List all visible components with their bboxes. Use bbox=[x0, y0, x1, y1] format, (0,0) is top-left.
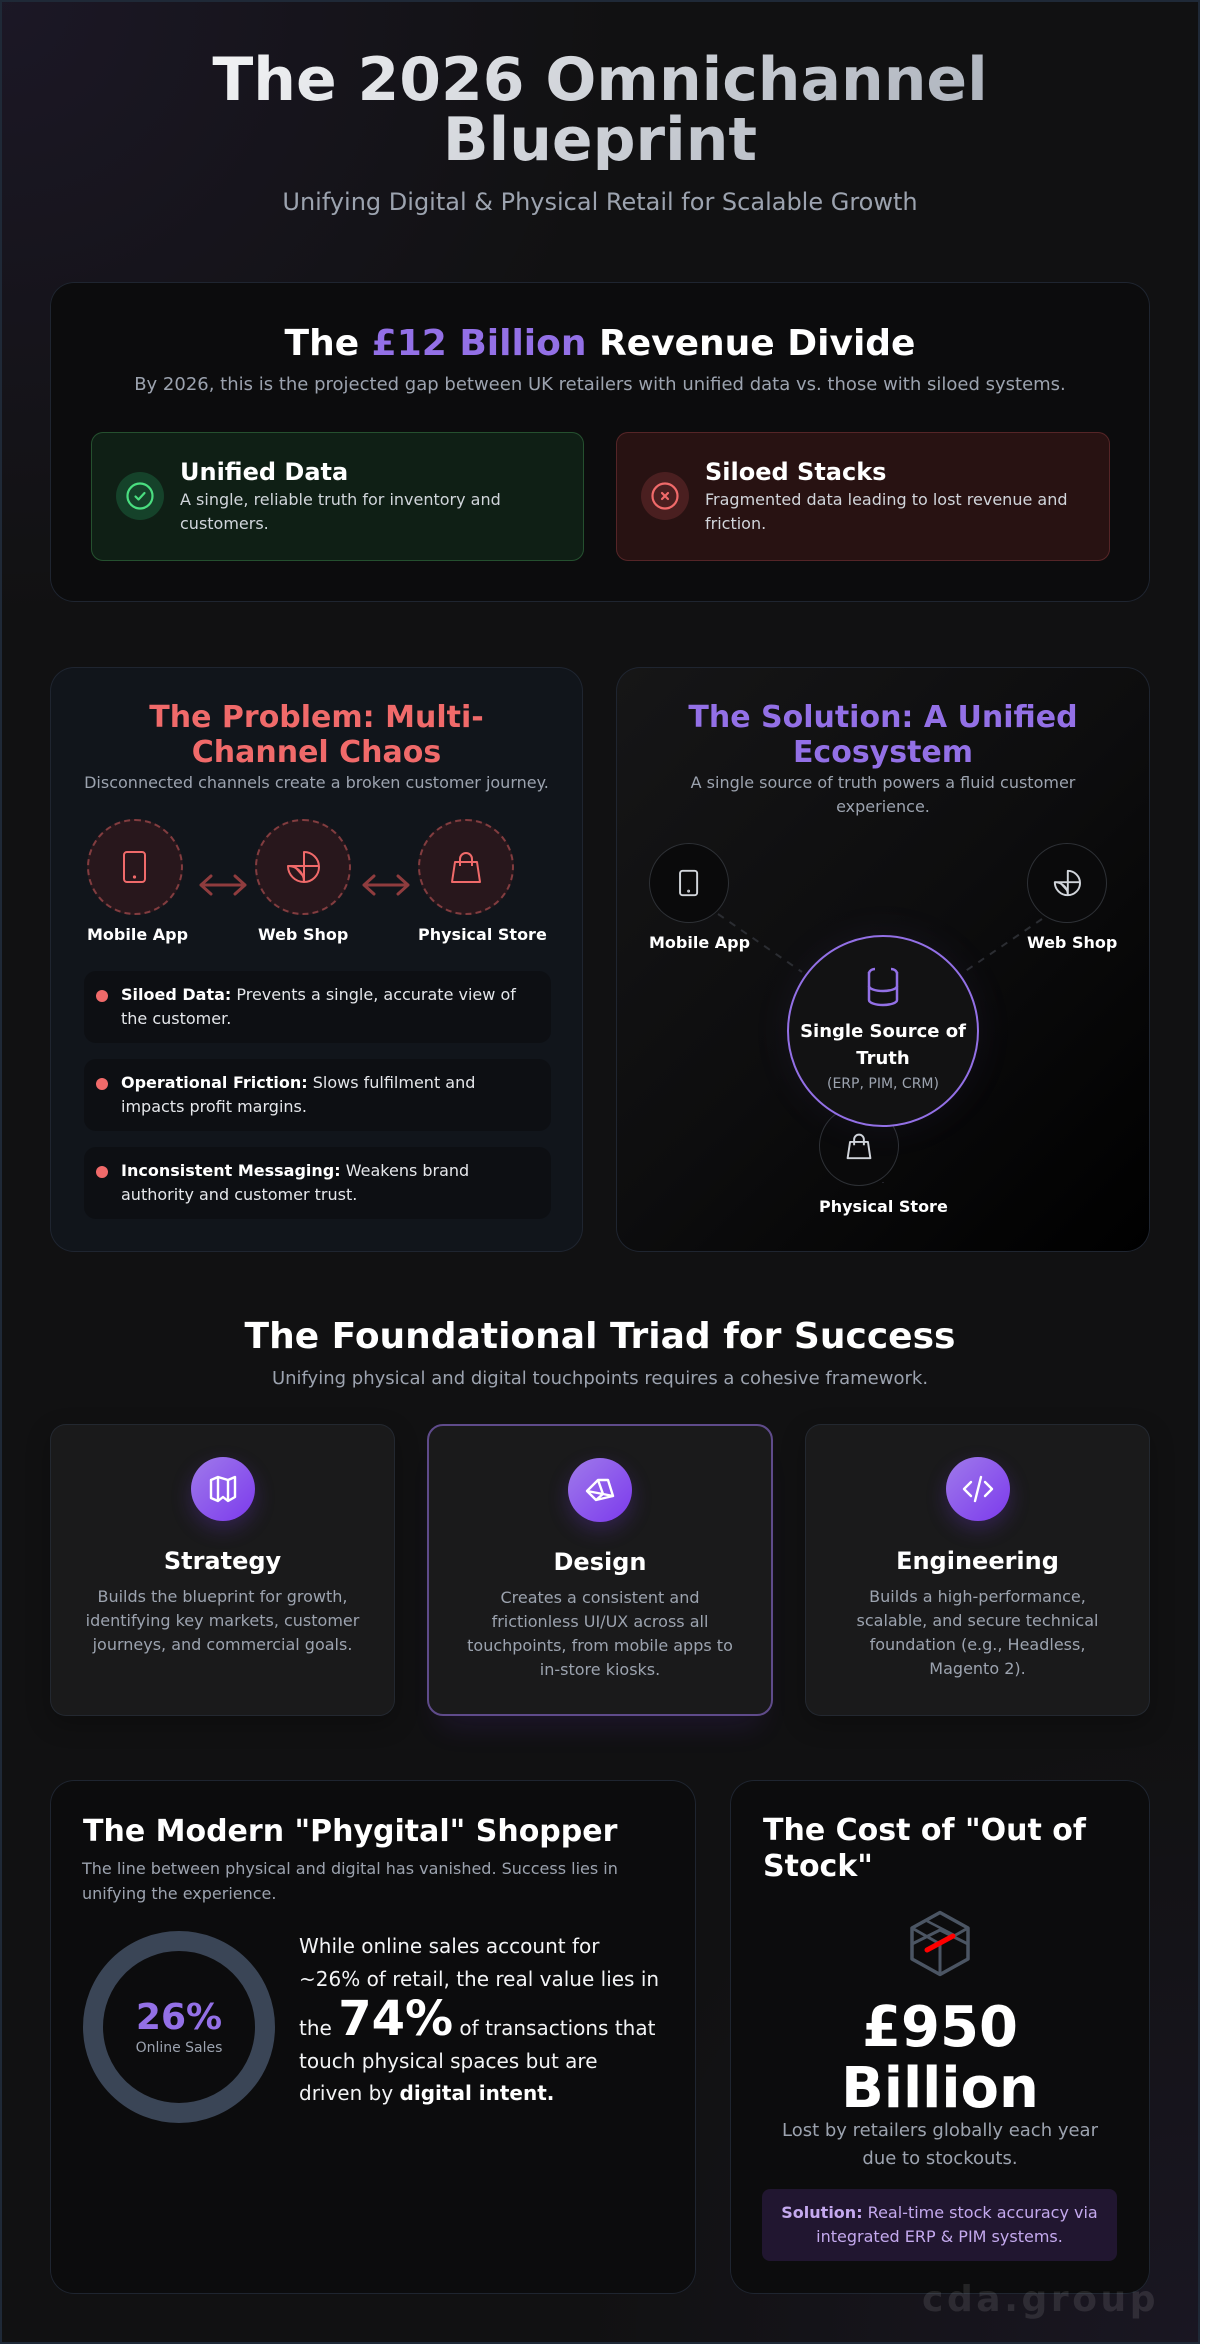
arrow bbox=[362, 874, 410, 896]
subtitle: Unifying Digital & Physical Retail for Scalable Growth bbox=[282, 188, 918, 216]
callout: solution bbox=[762, 2189, 1117, 2261]
panel: phygital shopper bbox=[50, 1780, 696, 2294]
text: siloed stacks: friction. bbox=[705, 514, 766, 533]
icon: mobile app bbox=[649, 843, 729, 923]
label: mobile app: Mobile App bbox=[87, 925, 188, 944]
node: physical store bbox=[819, 1114, 948, 1216]
text: design: frictionless UI/UX across all bbox=[492, 1612, 708, 1631]
icon: design bbox=[568, 1458, 632, 1522]
node: mobile app bbox=[649, 843, 750, 952]
card: siloed stacks bbox=[616, 432, 1110, 561]
panel: the solution bbox=[616, 667, 1150, 1252]
title: Blueprint bbox=[443, 105, 757, 175]
donut chart bbox=[83, 1931, 275, 2123]
bullet bbox=[96, 1166, 108, 1178]
text: 74% statistic: the 74% of transactions that bbox=[299, 1991, 655, 2047]
callout: solution: Solution: Real-time stock accuracy via bbox=[781, 2203, 1098, 2222]
connector lines bbox=[718, 913, 1042, 1183]
icon: broken box bbox=[910, 1910, 970, 1976]
heading: the problem: Channel Chaos bbox=[192, 735, 441, 770]
heading: out of stock: Stock" bbox=[763, 1849, 873, 1884]
icon: physical store bbox=[819, 1106, 899, 1186]
hub: single source of truth bbox=[787, 935, 979, 1127]
text: 74% statistic: touch physical spaces but are bbox=[299, 2049, 598, 2073]
description: the problem: Disconnected channels create a broken customer journey. bbox=[84, 773, 549, 792]
heading: foundational triad: The Foundational Triad for Success bbox=[245, 1316, 955, 1357]
text: design bbox=[467, 1588, 733, 1679]
description: phygital shopper: The line between physical and digital has vanished. Success lies in bbox=[82, 1859, 618, 1878]
description: the solution: experience. bbox=[836, 797, 930, 816]
text: design: touchpoints, from mobile apps to bbox=[467, 1636, 733, 1655]
text: 74% statistic bbox=[299, 1934, 659, 2105]
text: engineering bbox=[857, 1587, 1098, 1678]
heading: the solution bbox=[688, 700, 1078, 770]
description: the solution: A single source of truth powers a fluid customer bbox=[691, 773, 1075, 792]
title: unified data: Unified Data bbox=[180, 458, 348, 486]
heading: revenue divide: The £12 Billion Revenue Divide bbox=[285, 323, 915, 364]
panel: revenue divide bbox=[50, 282, 1150, 602]
title: siloed stacks: Siloed Stacks bbox=[705, 458, 886, 486]
card: unified data bbox=[91, 432, 584, 561]
text: siloed stacks: Fragmented data leading to lost revenue and bbox=[705, 490, 1067, 509]
value: 26%: 26% bbox=[136, 1997, 222, 2038]
heading: phygital shopper: The Modern "Phygital" Shopper bbox=[83, 1814, 617, 1849]
title: design: Design bbox=[554, 1548, 646, 1576]
text: inconsistent messaging: Inconsistent Messaging: Weakens brand bbox=[121, 1161, 469, 1180]
description: foundational triad: Unifying physical and digital touchpoints requires a cohesive framework. bbox=[272, 1368, 928, 1389]
label: hub bbox=[800, 1021, 966, 1069]
text: unified data: customers. bbox=[180, 514, 269, 533]
title: strategy: Strategy bbox=[164, 1547, 281, 1575]
bullet bbox=[96, 990, 108, 1002]
text: operational friction: Operational Friction: Slows fulfilment and bbox=[121, 1073, 475, 1092]
text: siloed stacks bbox=[705, 490, 1067, 533]
text: engineering: scalable, and secure technical bbox=[857, 1611, 1098, 1630]
icon: cross bbox=[641, 472, 689, 520]
value: £950 billion bbox=[841, 1995, 1039, 2120]
card: design bbox=[427, 1424, 773, 1716]
text: 74% statistic: ~26% of retail, the real value lies in bbox=[299, 1967, 659, 1991]
icon: code bbox=[946, 1457, 1010, 1521]
label: mobile app: Mobile App bbox=[649, 933, 750, 952]
text: engineering: Magento 2). bbox=[929, 1659, 1026, 1678]
value: £950 billion: Billion bbox=[841, 2056, 1039, 2120]
node: web shop bbox=[1027, 843, 1117, 952]
text: design: in-store kiosks. bbox=[540, 1660, 660, 1679]
icon: web shop bbox=[1027, 843, 1107, 923]
text: inconsistent messaging: authority and customer trust. bbox=[121, 1185, 357, 1204]
title: engineering: Engineering bbox=[896, 1547, 1059, 1575]
text: siloed data: Siloed Data: Prevents a single, accurate view of bbox=[121, 985, 516, 1004]
label: online sales: Online Sales bbox=[136, 2040, 222, 2056]
label: hub: Single Source of bbox=[800, 1021, 966, 1042]
label: physical store: Physical Store bbox=[819, 1197, 948, 1216]
text: engineering: foundation (e.g., Headless, bbox=[870, 1635, 1085, 1654]
card: strategy bbox=[50, 1424, 395, 1716]
text: 74% statistic: driven by digital intent. bbox=[299, 2081, 554, 2105]
heading: the solution: Ecosystem bbox=[793, 735, 973, 770]
text: siloed data: the customer. bbox=[121, 1009, 231, 1028]
icon: web shop bbox=[255, 819, 351, 915]
text: siloed data bbox=[121, 985, 516, 1028]
text: strategy: journeys, and commercial goals. bbox=[93, 1635, 352, 1654]
text: operational friction bbox=[121, 1073, 475, 1116]
arrow bbox=[200, 874, 246, 896]
description: phygital shopper bbox=[82, 1859, 618, 1903]
text: strategy: identifying key markets, customer bbox=[86, 1611, 359, 1630]
description: out of stock: due to stockouts. bbox=[862, 2148, 1018, 2169]
description: out of stock: Lost by retailers globally each year bbox=[782, 2120, 1098, 2141]
icon: physical store bbox=[418, 819, 514, 915]
text: design: Creates a consistent and bbox=[500, 1588, 700, 1607]
heading: out of stock bbox=[763, 1813, 1086, 1884]
icon: check bbox=[116, 472, 164, 520]
watermark: cda.group bbox=[922, 2279, 1159, 2320]
text: unified data bbox=[180, 490, 501, 533]
description: the solution bbox=[690, 773, 1076, 816]
label: web shop: Web Shop bbox=[1027, 933, 1117, 952]
label: hub systems: (ERP, PIM, CRM) bbox=[827, 1076, 939, 1092]
list item: operational friction bbox=[84, 1059, 551, 1131]
card: engineering bbox=[805, 1424, 1150, 1716]
icon: mobile app bbox=[87, 819, 183, 915]
icon: database bbox=[868, 968, 898, 1006]
list item: siloed data bbox=[84, 971, 551, 1043]
callout: solution: integrated ERP & PIM systems. bbox=[816, 2227, 1063, 2246]
label: web shop: Web Shop bbox=[258, 925, 348, 944]
title bbox=[50, 50, 1150, 170]
icon: map bbox=[190, 1457, 254, 1521]
list item: inconsistent messaging bbox=[84, 1147, 551, 1219]
text: strategy bbox=[86, 1587, 360, 1654]
bullet bbox=[96, 1078, 108, 1090]
text: engineering: Builds a high-performance, bbox=[869, 1587, 1086, 1606]
label: hub: Truth bbox=[856, 1048, 910, 1069]
panel: the problem bbox=[50, 667, 583, 1252]
title: The 2026 Omnichannel bbox=[212, 45, 988, 115]
text: strategy: Builds the blueprint for growth, bbox=[97, 1587, 348, 1606]
text: 74% statistic: While online sales account for bbox=[299, 1934, 599, 1958]
panel: out of stock bbox=[730, 1780, 1150, 2294]
description: out of stock bbox=[782, 2120, 1098, 2169]
heading: the problem bbox=[149, 700, 484, 770]
description: revenue divide: By 2026, this is the projected gap between UK retailers with unified data vs. those with siloed systems. bbox=[134, 374, 1066, 395]
text: operational friction: impacts profit margins. bbox=[121, 1097, 307, 1116]
value: £950 billion: £950 bbox=[862, 1995, 1018, 2060]
text: inconsistent messaging bbox=[121, 1161, 469, 1204]
heading: the solution: The Solution: A Unified bbox=[688, 700, 1078, 735]
heading: out of stock: The Cost of "Out of bbox=[763, 1813, 1086, 1848]
label: physical store: Physical Store bbox=[418, 925, 547, 944]
channel: web shop bbox=[255, 819, 351, 944]
text: unified data: A single, reliable truth for inventory and bbox=[180, 490, 501, 509]
description: phygital shopper: unifying the experience. bbox=[82, 1884, 276, 1903]
channel: mobile app bbox=[87, 819, 188, 944]
heading: the problem: The Problem: Multi- bbox=[149, 700, 484, 735]
channel: physical store bbox=[418, 819, 547, 944]
